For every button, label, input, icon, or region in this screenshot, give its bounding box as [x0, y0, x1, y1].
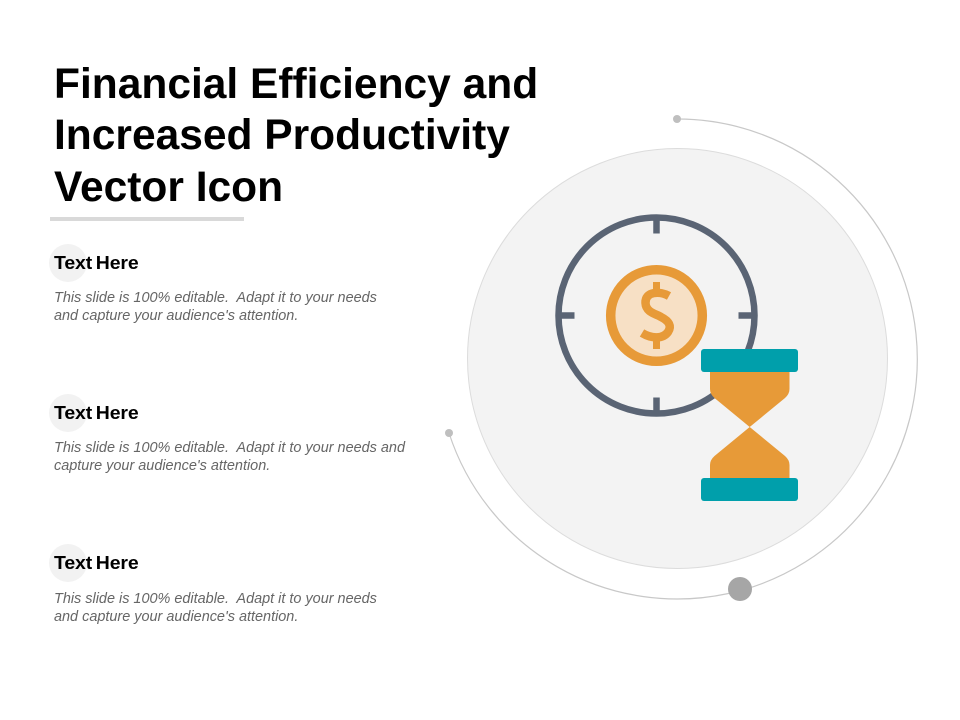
title: [54, 60, 538, 210]
text block 3: and capture your audience's attention.: [54, 609, 298, 625]
text block 3: [49, 544, 377, 625]
text block 3: Text Here: [54, 553, 139, 573]
large background circle: [468, 148, 888, 568]
arc start dot: [673, 115, 681, 123]
arc end dot: [445, 429, 453, 437]
text block 1: [49, 244, 377, 324]
text block 2: capture your audience's attention.: [54, 458, 270, 474]
text block 3: This slide is 100% editable. Adapt it to your needs: [54, 591, 377, 607]
icon: hourglass: [701, 349, 798, 501]
icon: target clock ring: [558, 218, 754, 414]
icon: dollar coin: [611, 270, 702, 361]
text block 2: [49, 394, 406, 474]
title: Increased Productivity: [54, 112, 510, 159]
text block 1: and capture your audience's attention.: [54, 308, 298, 324]
arc marker dot: [728, 577, 752, 601]
text block 1: Text Here: [54, 253, 139, 273]
text block 1: This slide is 100% editable. Adapt it to your needs: [54, 290, 377, 306]
title: Financial Efficiency and: [54, 60, 538, 108]
title underline: [50, 217, 244, 221]
outer arc: [449, 119, 917, 599]
text block 2: This slide is 100% editable. Adapt it to your needs and: [54, 440, 405, 456]
title: Vector Icon: [54, 164, 283, 210]
text block 2: Text Here: [54, 403, 139, 423]
